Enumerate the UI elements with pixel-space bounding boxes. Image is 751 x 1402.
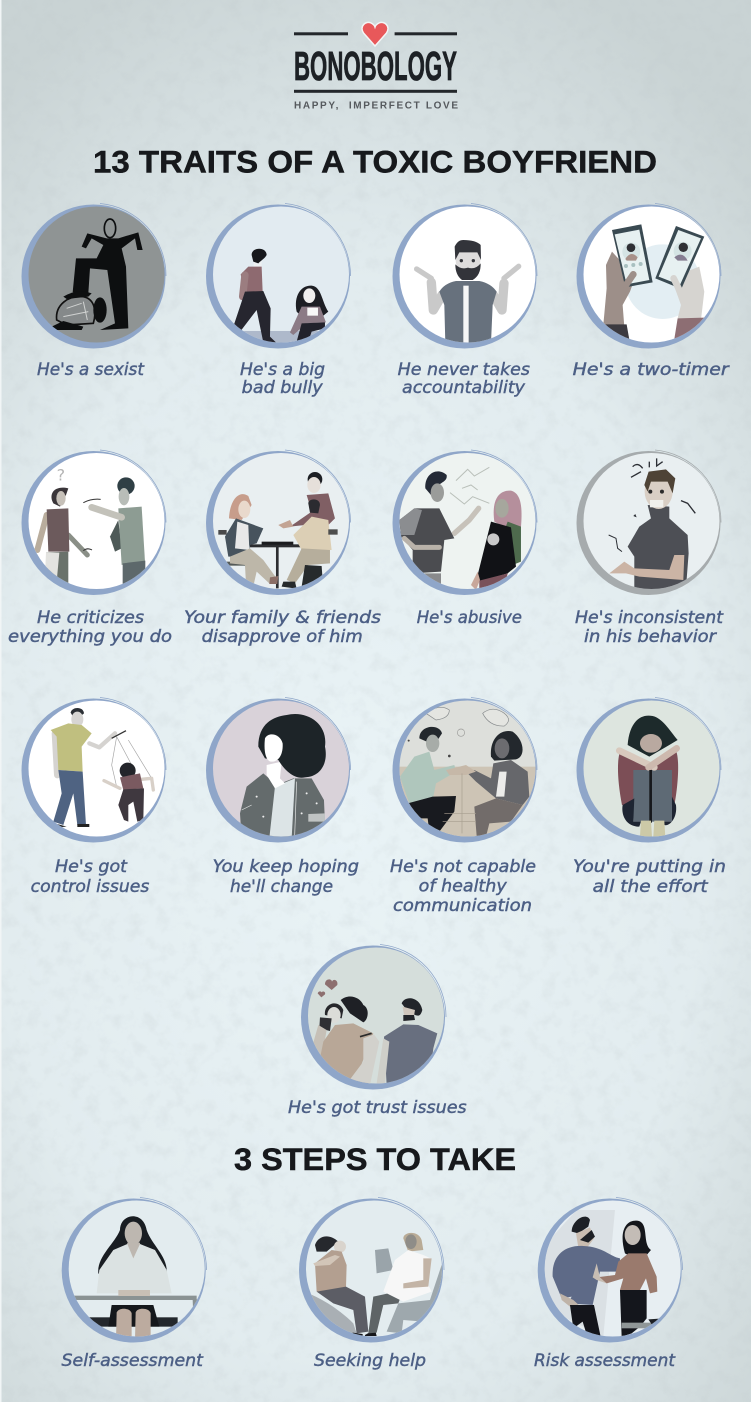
logo: Bonobology	[294, 22, 458, 111]
trait: He's a big bad bully	[206, 204, 351, 398]
trait: He's abusive	[392, 450, 537, 628]
icon: therapist and crying patient	[299, 1198, 445, 1343]
step: Seeking help	[299, 1198, 445, 1371]
icon: anxious man scratching his arm	[576, 450, 721, 595]
label: He's got trust issues	[288, 1098, 467, 1118]
trait: He's got control issues	[22, 698, 166, 897]
icon: couple struggling to talk	[392, 698, 537, 843]
icon: man pointing at confused woman: ?	[57, 466, 65, 485]
trait: You're putting in all the effort	[573, 698, 726, 897]
label: everything you do	[8, 627, 172, 647]
label: bad bully	[242, 378, 324, 398]
trait: He never takes accountability	[392, 204, 537, 398]
label: disapprove of him	[202, 627, 363, 647]
label: in his behavior	[584, 627, 717, 647]
step: Self-assessment	[62, 1198, 207, 1371]
icon: two hands holding phones	[576, 204, 721, 348]
trait: He criticizes everything you do	[8, 450, 172, 647]
label: Self-assessment	[62, 1351, 204, 1371]
wordmark: BONOBOLOGY	[294, 43, 457, 89]
icon: heart	[362, 22, 388, 46]
label	[390, 857, 536, 916]
label: He's a big	[240, 360, 325, 380]
icon: woman with phone beside man	[301, 944, 446, 1090]
label	[573, 857, 726, 897]
label: He's a two-timer	[573, 360, 730, 380]
heading: 3 steps to take: 3 STEPS TO TAKE	[234, 1141, 516, 1177]
label: Seeking help	[314, 1351, 426, 1371]
tagline: HAPPY, IMPERFECT LOVE	[294, 100, 458, 111]
icon: woman hugging her knees	[576, 698, 721, 842]
trait: He's a two-timer	[573, 204, 730, 380]
label: of healthy	[419, 877, 508, 897]
label: communication	[393, 896, 532, 916]
label: accountability	[402, 378, 526, 398]
label: he'll change	[230, 877, 333, 897]
icon: man yelling at woman	[392, 450, 537, 595]
label: control issues	[31, 877, 149, 897]
trait: He's got trust issues	[288, 944, 467, 1118]
label: Risk assessment	[534, 1351, 676, 1371]
icon: man pointing at confused woman	[22, 450, 166, 595]
title: 13 TRAITS OF A TOXIC BOYFRIEND	[93, 144, 657, 180]
label	[575, 608, 724, 647]
icon: friends arguing at a table	[206, 450, 351, 595]
label: He's not capable	[390, 857, 536, 877]
label: Your family & friends	[184, 608, 381, 628]
label: He's abusive	[417, 608, 522, 628]
label: He never takes	[398, 360, 530, 380]
label	[240, 360, 325, 398]
icon: man shrugging	[392, 204, 537, 348]
label	[8, 608, 172, 647]
step: Risk assessment	[534, 1198, 683, 1371]
label	[398, 360, 530, 398]
label: You keep hoping	[213, 857, 359, 877]
trait: He's a sexist	[22, 204, 166, 380]
label: all the effort	[593, 877, 709, 897]
trait: You keep hoping he'll change	[206, 698, 359, 897]
label: He criticizes	[37, 608, 144, 628]
trait: He's inconsistent in his behavior	[575, 450, 724, 647]
label	[31, 857, 149, 897]
trait: He's not capable of healthy communication	[390, 698, 537, 916]
label	[184, 608, 381, 647]
icon: man and woman standing together	[538, 1198, 683, 1342]
label: You're putting in	[573, 857, 726, 877]
icon: man stepping on crouching woman	[22, 204, 166, 348]
icon: man controlling a puppet woman	[22, 698, 166, 842]
icon: woman seated at a table	[62, 1198, 207, 1342]
icon: thoughtful woman	[206, 698, 351, 842]
label	[213, 857, 359, 897]
label: He's inconsistent	[575, 608, 724, 628]
trait: Your family & friends disapprove of him	[184, 450, 381, 647]
icon: bully and girl on floor	[206, 204, 351, 351]
label: He's a sexist	[37, 360, 145, 380]
label: He's got	[55, 857, 128, 877]
